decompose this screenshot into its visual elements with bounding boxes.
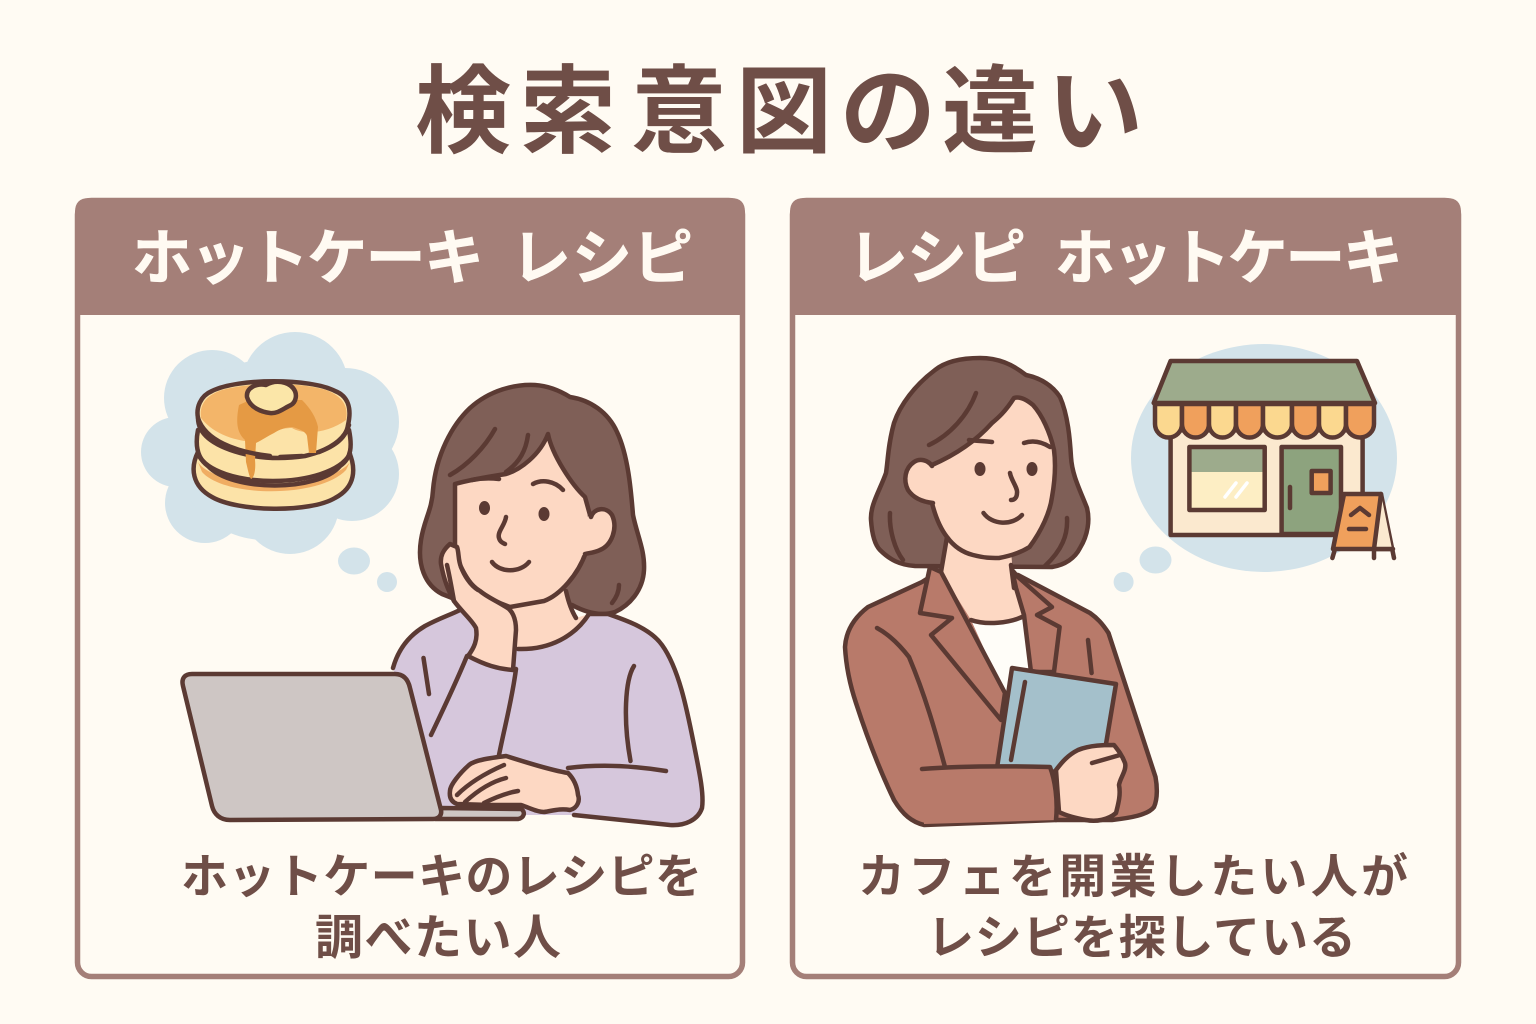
- laptop: [182, 674, 524, 820]
- hand on keyboard: [450, 756, 579, 812]
- ear: [580, 509, 614, 556]
- hair: [420, 385, 644, 614]
- wall: [1171, 430, 1363, 535]
- panel: right, cafe owner intent: [790, 198, 1461, 976]
- awning roof: [1154, 361, 1375, 403]
- character: businesswoman with book: [845, 358, 1157, 825]
- keyword: recipe: レシピ: [511, 225, 693, 292]
- sleeve and fold lines: [424, 656, 666, 771]
- thought cloud with pancakes: [141, 332, 399, 592]
- jacket: [845, 570, 1157, 825]
- panel frame: [78, 200, 742, 976]
- thought cloud: [141, 332, 399, 592]
- lapels: [920, 567, 1005, 720]
- facial features: [969, 440, 1050, 523]
- panel: left, pancake recipe intent: [75, 198, 745, 976]
- panel header band: [75, 198, 745, 315]
- ear: [905, 460, 942, 506]
- sweater: [393, 610, 703, 825]
- book: [997, 668, 1116, 772]
- left heading: [132, 225, 693, 292]
- caption line 1: カフェを開業したい人が: [858, 850, 1408, 903]
- face: [455, 434, 590, 607]
- keyword: pancake: ホットケーキ: [1055, 225, 1403, 292]
- caption line 2: レシピを探している: [927, 911, 1356, 964]
- icon: pancake stack: [194, 381, 353, 509]
- title: 検索意図の違い: [415, 59, 1143, 166]
- sandwich board sign: [1332, 494, 1394, 558]
- keyword: recipe: レシピ: [848, 225, 1026, 292]
- character: woman at laptop: [182, 385, 703, 825]
- sleeve: [924, 767, 1058, 824]
- shirt: [971, 615, 1035, 695]
- hair strands: [890, 393, 1067, 566]
- hair strands: [450, 429, 528, 480]
- neck: [495, 590, 589, 649]
- keyword: pancake: ホットケーキ: [132, 225, 484, 292]
- caption line 2: 調べたい人: [315, 912, 561, 965]
- thought cloud: [1114, 344, 1397, 592]
- hand holding book: [1056, 745, 1125, 821]
- panel frame: [792, 200, 1458, 976]
- neck: [941, 537, 1026, 623]
- right caption: [858, 850, 1408, 964]
- jacket fold lines: [877, 628, 1092, 767]
- facial features: [479, 481, 563, 570]
- thought cloud with shop: [1114, 344, 1397, 592]
- left caption: [181, 850, 702, 965]
- right heading: [848, 225, 1403, 292]
- door: [1282, 447, 1341, 534]
- icon: shop: [1154, 361, 1394, 558]
- hand on cheek: [441, 544, 516, 670]
- awning scallops: [1155, 404, 1374, 438]
- panel header band: [790, 198, 1461, 315]
- face: [932, 397, 1055, 558]
- caption line 1: ホットケーキのレシピを: [181, 850, 702, 903]
- shop window: [1189, 447, 1265, 472]
- hair: [871, 358, 1088, 567]
